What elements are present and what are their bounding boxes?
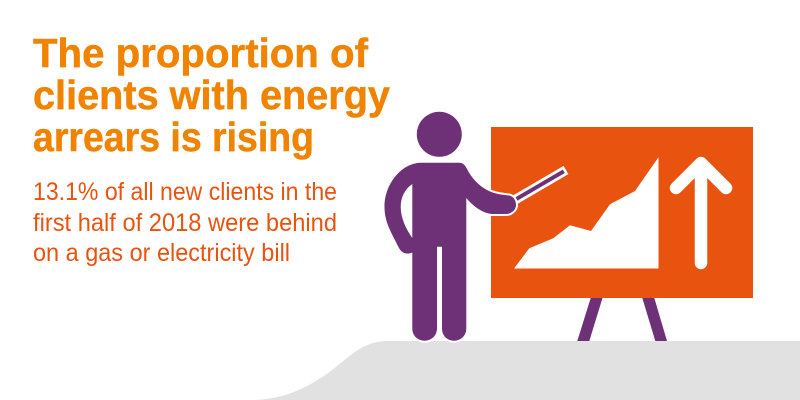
title: clients with energy [33, 72, 390, 118]
subtitle text: first half of 2018 were behind [33, 209, 337, 237]
title [33, 30, 390, 160]
pointer stick [513, 170, 566, 201]
presenter figure [384, 112, 566, 341]
head [417, 112, 462, 157]
icon: up arrow [676, 163, 726, 263]
subtitle text: 13.1% of all new clients in the [33, 178, 337, 206]
subtitle text [33, 178, 337, 267]
board panel [491, 127, 753, 298]
grey ground hill [255, 341, 800, 400]
body with arms and legs [384, 163, 516, 341]
area chart rising [514, 157, 658, 268]
subtitle text: on a gas or electricity bill [33, 239, 290, 267]
presentation board on easel [491, 127, 753, 341]
title: The proportion of [33, 30, 368, 76]
easel legs [577, 298, 667, 341]
title: arrears is rising [33, 114, 314, 160]
